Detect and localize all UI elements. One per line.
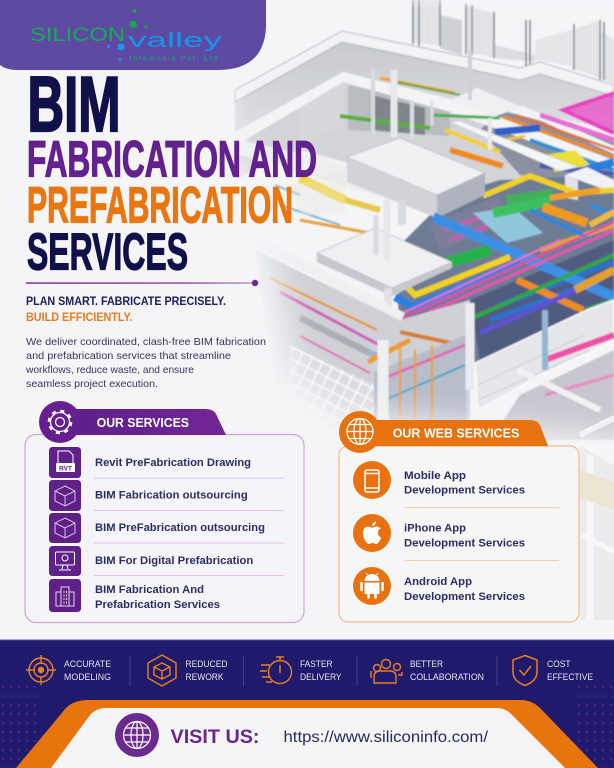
icon: apple (353, 514, 391, 552)
mid MEP colours (473, 207, 543, 243)
services list text: BIM Fabrication And (95, 584, 204, 596)
panel: our web services (339, 411, 579, 622)
orange upper runs (503, 117, 614, 157)
upper walls (235, 40, 614, 140)
intro paragraph: workflows, reduce waste, and ensure (25, 364, 194, 376)
icon: team (371, 660, 402, 683)
website url: https://www.siliconinfo.com/ (284, 729, 489, 746)
icon: globe (115, 713, 159, 757)
logo wordmark: valley (128, 30, 222, 52)
intro paragraph: seamless project execution. (26, 378, 158, 390)
footer band (0, 639, 614, 768)
icon: shield check (513, 656, 537, 686)
web services text: Development Services (404, 538, 525, 550)
web services header band (339, 411, 548, 453)
logo wordmark: Infomedia Pvt. Ltd. (130, 56, 222, 62)
web services text: Development Services (404, 591, 525, 603)
benefit: better collaboration: BETTER (410, 659, 443, 669)
upper yellow pipe (483, 176, 614, 196)
web services text (404, 470, 525, 603)
right slab (565, 167, 614, 193)
services list text: BIM For Digital Prefabrication (95, 555, 253, 567)
visit us label: VISIT US: (170, 726, 260, 748)
web services text: Android App (404, 576, 472, 588)
icon: target (26, 655, 56, 685)
left band and pipes (240, 140, 440, 210)
tagline: BUILD EFFICIENTLY. (26, 312, 132, 324)
web services text: Mobile App (404, 470, 466, 482)
benefit: better collaboration: COLLABORATION (410, 672, 484, 682)
benefit: faster delivery: FASTER (300, 659, 333, 669)
columns (390, 70, 398, 137)
benefit: faster delivery: DELIVERY (300, 672, 342, 682)
left fading beams and pipes (255, 240, 403, 317)
intro paragraph: and prefabrication services that streamline (26, 350, 231, 362)
icon: prefabrication cube (49, 513, 81, 543)
benefit: faster delivery (300, 659, 342, 682)
magenta roof frame (563, 93, 614, 133)
title: BIM (28, 60, 120, 148)
services list text: Revit PreFabrication Drawing (95, 457, 251, 469)
benefit: accurate modeling: MODELING (64, 672, 111, 682)
benefit: cost effective: COST (547, 659, 571, 669)
intro paragraph: We deliver coordinated, clash-free BIM fabrication (26, 336, 266, 348)
services list text: Prefabrication Services (95, 599, 220, 611)
main slab 1 (347, 157, 437, 218)
benefit: reduced rework: REWORK (186, 672, 224, 682)
title: FABRICATION AND (27, 130, 317, 188)
benefit: accurate modeling (64, 659, 111, 682)
lower left region base (255, 250, 470, 425)
benefit: cost effective: EFFECTIVE (547, 672, 593, 682)
dense MEP base (398, 175, 614, 372)
title divider (26, 280, 258, 286)
roof fences (412, 0, 614, 84)
parapet bands (235, 31, 614, 102)
services header band (39, 401, 226, 443)
logo badge (0, 0, 266, 70)
panel: our services (25, 401, 304, 622)
title: SERVICES (27, 224, 188, 282)
small slab + beam (450, 88, 522, 117)
services list text: BIM PreFabrication outsourcing (95, 522, 265, 534)
column and right panel (466, 303, 474, 390)
logo wordmark: SILICON (30, 25, 125, 46)
benefit: reduced rework: REDUCED (186, 659, 228, 669)
benefit: accurate modeling: ACCURATE (64, 659, 111, 669)
icon: mobile (353, 461, 391, 499)
icon: digital monitor (49, 546, 81, 576)
services header band: OUR SERVICES (97, 416, 189, 430)
web services header band: OUR WEB SERVICES (393, 426, 519, 440)
faint lower right structure (580, 418, 614, 620)
benefit: reduced rework (186, 659, 228, 682)
web services text: Development Services (404, 484, 525, 496)
icon: buildings (49, 579, 81, 612)
benefit: better collaboration (410, 659, 484, 682)
icon: android (353, 567, 391, 605)
logo dots (107, 9, 148, 61)
services list dividers (94, 478, 284, 576)
title (27, 60, 317, 282)
services list text: BIM Fabrication outsourcing (95, 490, 248, 502)
services list text (95, 457, 265, 611)
visit us banner (16, 700, 598, 768)
tagline (26, 296, 226, 324)
logo wordmark (30, 25, 222, 62)
slab 2 (317, 253, 452, 296)
title: PREFABRICATION (27, 176, 293, 234)
icon: stopwatch (260, 657, 292, 684)
icon: hexagon cube (148, 655, 176, 686)
benefit: cost effective (547, 659, 593, 682)
web services text: iPhone App (404, 522, 466, 534)
intro paragraph (25, 336, 266, 390)
icon: revit file: RVT (59, 466, 72, 472)
tagline: PLAN SMART. FABRICATE PRECISELY. (26, 296, 226, 308)
icon: revit file (49, 447, 81, 478)
icon: fabrication cube (49, 480, 81, 511)
lattice floor (290, 345, 375, 430)
web services dividers (404, 508, 559, 560)
